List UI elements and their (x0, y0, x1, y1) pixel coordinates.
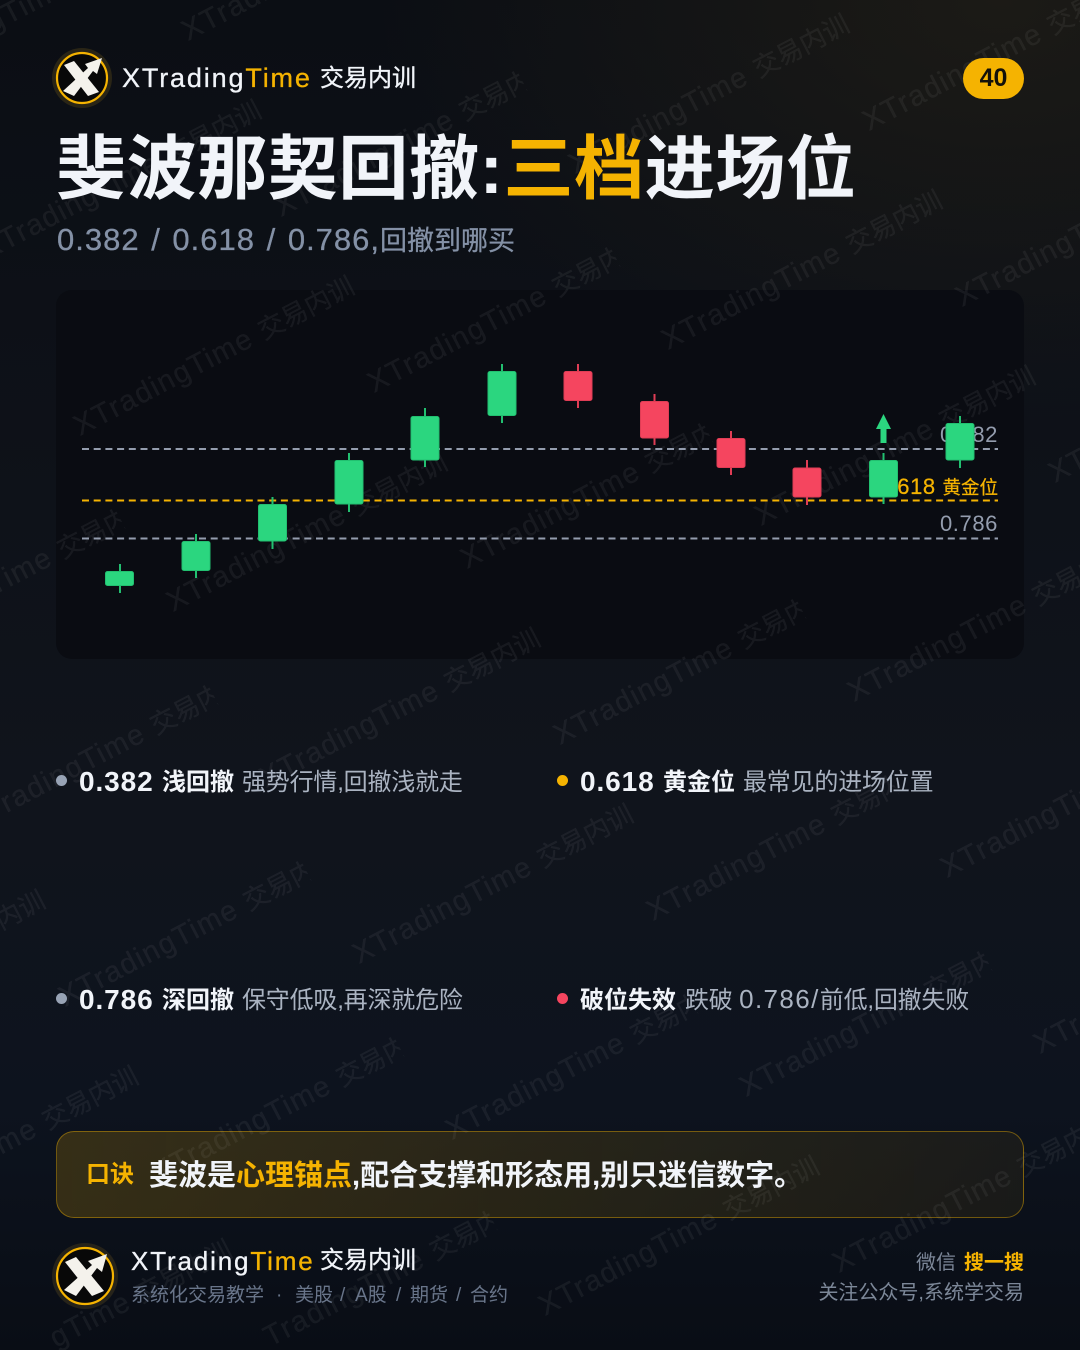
footer brand suffix: 交易内训 (320, 1247, 416, 1274)
footer tagline: / (340, 1285, 345, 1306)
watermark layer: XTradingTime 交易内训 (734, 931, 1026, 1103)
level labels: 0.786 (940, 511, 998, 536)
watermark layer: XTradingTime 交易内训 (455, 403, 747, 575)
footer tagline: / (396, 1285, 401, 1306)
footer tagline: A股 (355, 1285, 387, 1306)
level lines (82, 449, 998, 538)
header brand name: XTradingTime (122, 63, 312, 93)
watermark layer: XTradingTime 交易内训 (53, 841, 345, 1013)
page number badge (963, 58, 1024, 99)
watermark layer: XTradingTime 交易内训 (641, 755, 933, 927)
bullet: 0.786: 保守低吸,再深就危险 (242, 987, 463, 1014)
icon: entry arrow (876, 414, 891, 443)
footer right: wechat search: 微信 搜一搜 (916, 1252, 1024, 1274)
bullet: 0.786 (56, 984, 463, 1015)
bullet: 0.618: 最常见的进场位置 (743, 769, 933, 796)
watermark layer: XTradingTime 交易内训 (563, 8, 855, 180)
watermark layer: TradingTime 交易内训 (258, 1191, 531, 1350)
footer tagline: 期货 (410, 1285, 448, 1306)
bullet: 0.382: 强势行情,回撤浅就走 (242, 769, 463, 796)
subtitle: 0.382 / 0.618 / 0.786,回撤到哪买 (57, 222, 515, 257)
footer tagline: 美股 (295, 1285, 333, 1306)
watermark layer: XTradingTime 交易内训 (347, 798, 639, 970)
watermark layer: XTradingTime 交易内训 (362, 227, 654, 399)
bullet: 0.618 (557, 766, 933, 797)
green candles at entry (870, 416, 974, 504)
icon: header logo (52, 48, 112, 108)
watermark layer: XTradingTime 交易内训 (749, 360, 1041, 532)
watermark layer: XTradingTime 交易内训 (269, 51, 561, 223)
watermark layer: XTradingTime 交易内训 (548, 579, 840, 751)
footer tagline (131, 1284, 508, 1306)
icon: footer logo (52, 1243, 118, 1309)
footer tagline: 合约 (470, 1285, 508, 1306)
footer right: follow note: 关注公众号,系统学交易 (818, 1282, 1024, 1304)
page number badge: 40 (980, 64, 1007, 92)
watermark layer: XTradingTime 交易内训 (68, 270, 360, 442)
footer brand name: XTradingTime (131, 1246, 315, 1276)
bullet: 0.618: 黄金位 (663, 769, 735, 796)
green candles rising (106, 364, 516, 593)
bullet: 0.382 (56, 766, 463, 797)
level labels (878, 422, 998, 536)
chart: Fibonacci retracement candlesticks (82, 364, 998, 593)
red candles pulling back (564, 364, 821, 505)
watermark layer: XTradingTime 交易内训 (656, 184, 948, 356)
level labels: 0.382 (940, 422, 998, 447)
bullet: broken level: 破位失效 (580, 987, 676, 1014)
callout label: 口诀 (86, 1161, 134, 1188)
footer tagline: · (276, 1285, 282, 1306)
title: 斐波那契回撤:三档进场位 (56, 130, 857, 208)
panel: chart background (56, 290, 1024, 659)
level labels: 0.618 黄金位 (878, 474, 998, 499)
bullet: 0.382: 浅回撤 (162, 769, 234, 796)
bullet: broken level (557, 984, 969, 1014)
watermark layer: XTradingTime 交易内训 (440, 974, 732, 1146)
watermark layer: XTradingTime 交易内训 (161, 446, 453, 618)
callout text: 斐波是心理锚点,配合支撑和形态用,别只迷信数字。 (149, 1160, 803, 1192)
footer tagline: 系统化交易教学 (131, 1285, 264, 1306)
footer tagline: / (456, 1285, 461, 1306)
bullet: broken level: 跌破 0.786/前低,回撤失败 (685, 984, 969, 1014)
panel: mnemonic callout background (56, 1131, 1024, 1218)
bullet: 0.786: 0.786 (79, 984, 154, 1015)
bullet: 0.382: 0.382 (79, 766, 154, 797)
watermark layer: XTradingTime 交易内训 (533, 1150, 825, 1322)
watermark layer: XTradingTime 交易内训 (146, 1017, 438, 1189)
bullet: 0.618: 0.618 (580, 766, 655, 797)
bullet: 0.786: 深回撤 (162, 987, 234, 1014)
header brand suffix: 交易内训 (320, 65, 416, 92)
watermark layer: XTradingTime 交易内训 (254, 622, 546, 794)
